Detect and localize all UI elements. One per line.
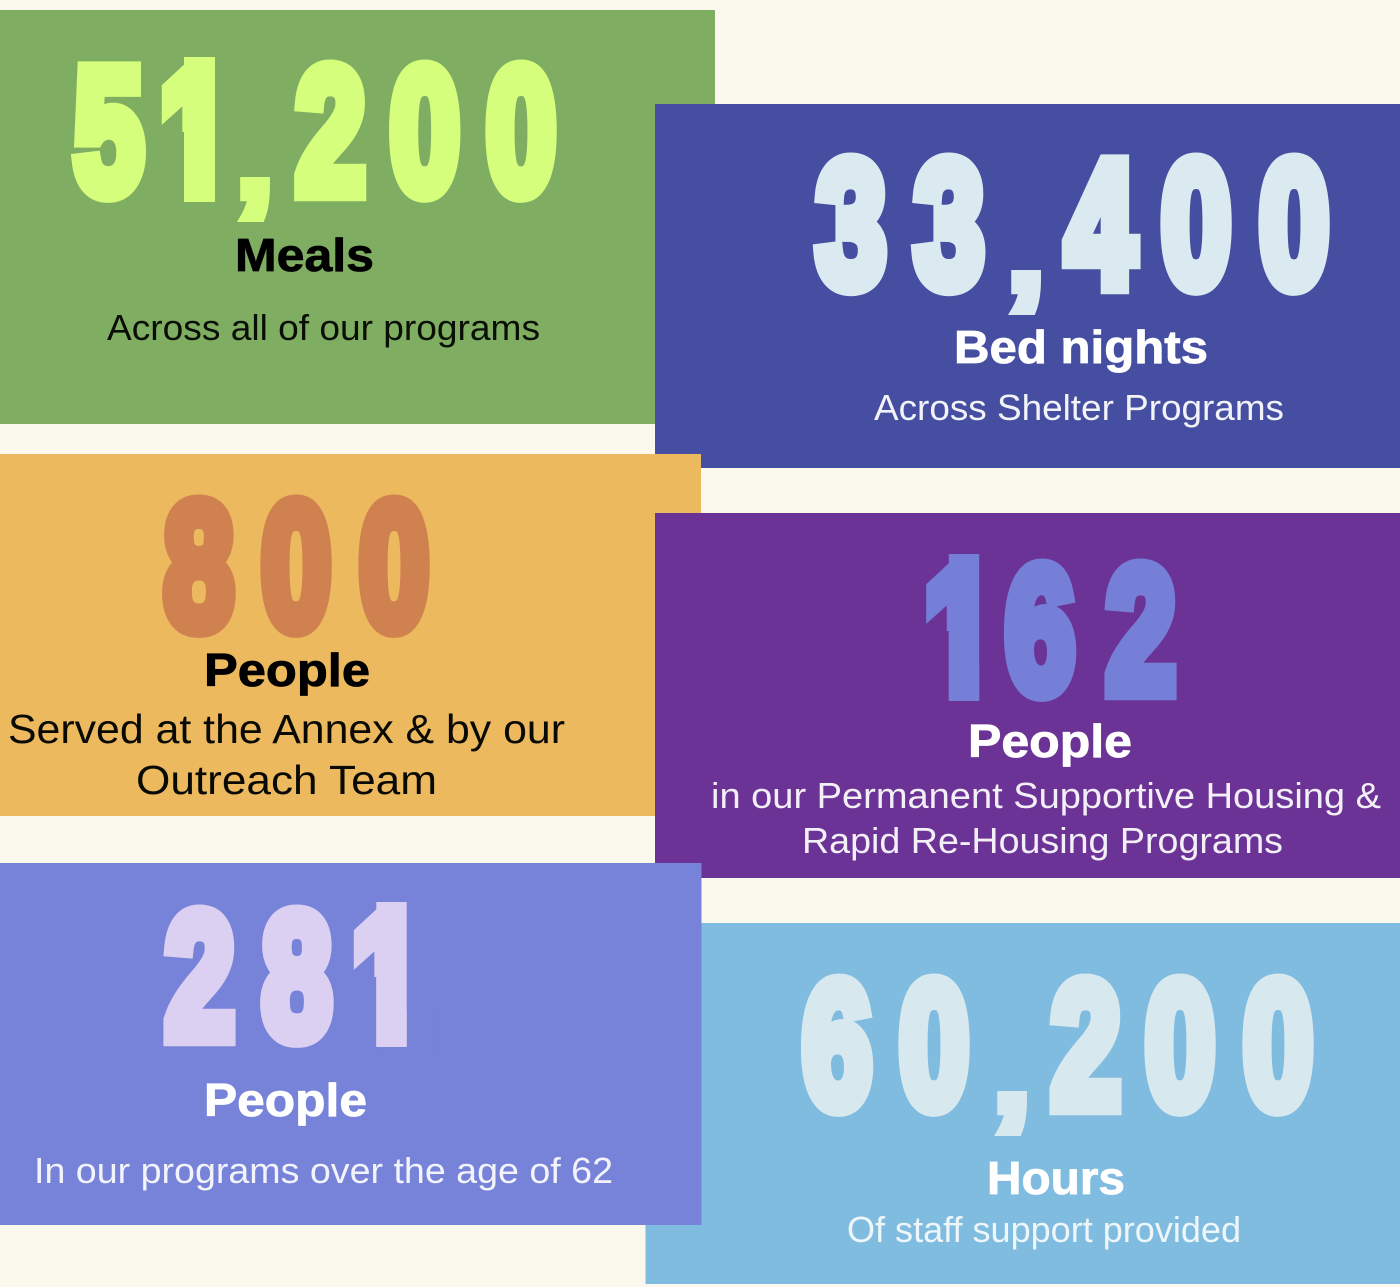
- number: 162: 162: [924, 530, 1176, 730]
- panel: bed nights: [655, 104, 1400, 468]
- number: 51,200: 51,200: [74, 31, 556, 231]
- text: across shelter programs: Across Shelter Programs: [874, 387, 1284, 428]
- text: served at the annex: Served at the Annex & by our: [8, 706, 565, 752]
- number: 800: 800: [164, 466, 429, 666]
- panel: meals: [0, 10, 715, 424]
- heading: People: People: [204, 644, 370, 696]
- heading: People: People: [968, 715, 1132, 767]
- number: 33,400: 33,400: [817, 124, 1329, 324]
- panel: people over 62: [0, 863, 702, 1225]
- number: 60,200: 60,200: [802, 945, 1313, 1145]
- text: over the age of 62: In our programs over the age of 62: [34, 1150, 613, 1191]
- heading: People: People: [204, 1074, 367, 1126]
- text: staff support: Of staff support provided: [847, 1209, 1241, 1250]
- panel: hours: [646, 923, 1400, 1284]
- heading: Hours: Hours: [987, 1152, 1125, 1204]
- panel: people served: [0, 454, 701, 816]
- text: rapid re-housing: Rapid Re-Housing Programs: [802, 820, 1283, 861]
- number: 281: 281: [165, 876, 421, 1076]
- text: across all programs: Across all of our programs: [107, 307, 540, 348]
- panel: permanent housing: [655, 513, 1400, 878]
- text: outreach team: Outreach Team: [136, 757, 437, 803]
- heading: Meals: Meals: [235, 229, 374, 281]
- text: permanent supportive housing: in our Permanent Supportive Housing &: [711, 775, 1381, 816]
- heading: Bed nights: Bed nights: [954, 321, 1208, 373]
